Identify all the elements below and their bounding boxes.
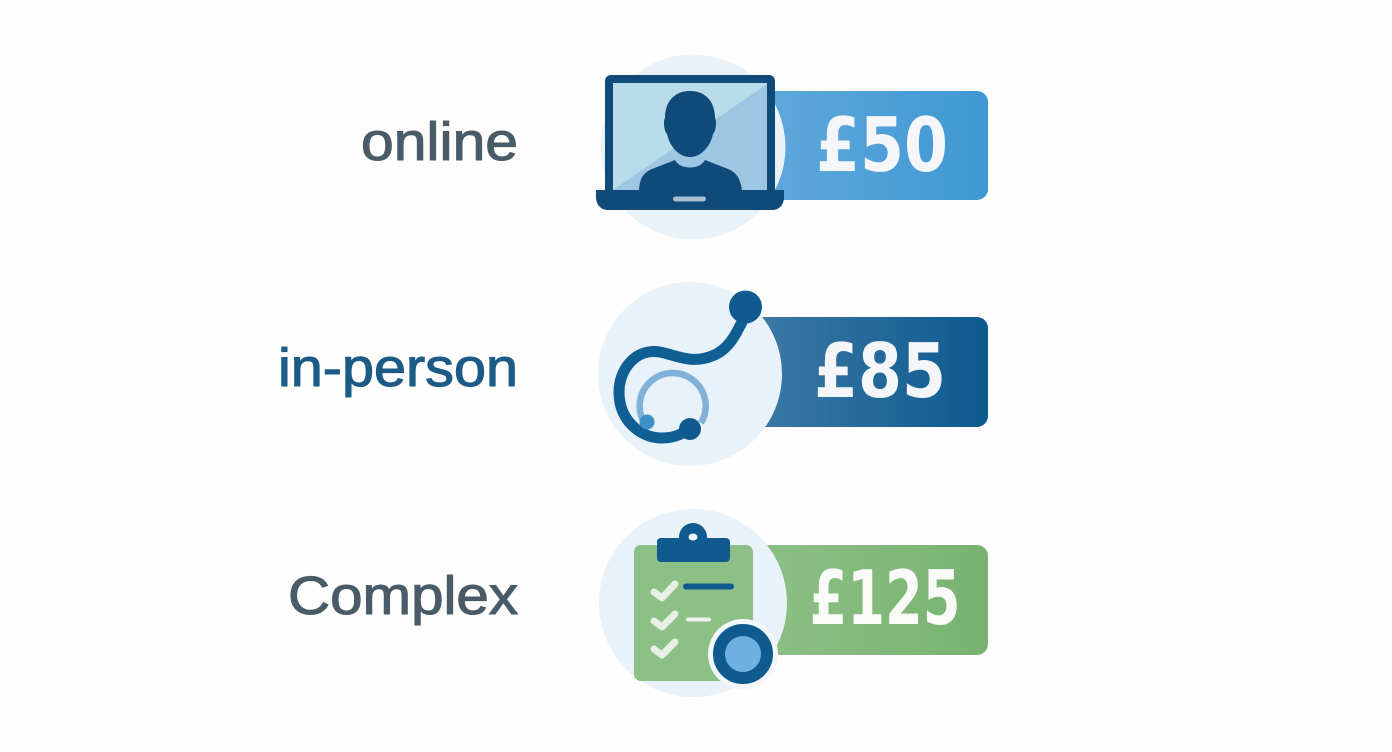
icon: stethoscope — [619, 290, 762, 440]
label: Complex: Complex — [288, 566, 518, 626]
row: in-person — [278, 282, 988, 466]
icon circle: online — [600, 54, 786, 240]
price: £85: £85 — [814, 327, 946, 415]
icon: laptop with person — [596, 75, 784, 210]
price bar: £125 — [740, 545, 988, 655]
price bar: £50 — [740, 91, 988, 200]
price bar: £85 — [740, 317, 988, 427]
row: complex — [288, 509, 988, 697]
price: £50: £50 — [816, 101, 948, 189]
icon circle: in-person — [598, 282, 782, 466]
icon circle: complex — [599, 509, 787, 697]
price: £125: £125 — [810, 554, 960, 642]
label: in-person: in-person — [278, 338, 518, 398]
label: online: online — [361, 112, 518, 172]
icon: clipboard with checklist — [634, 523, 778, 689]
row: online — [361, 54, 988, 240]
